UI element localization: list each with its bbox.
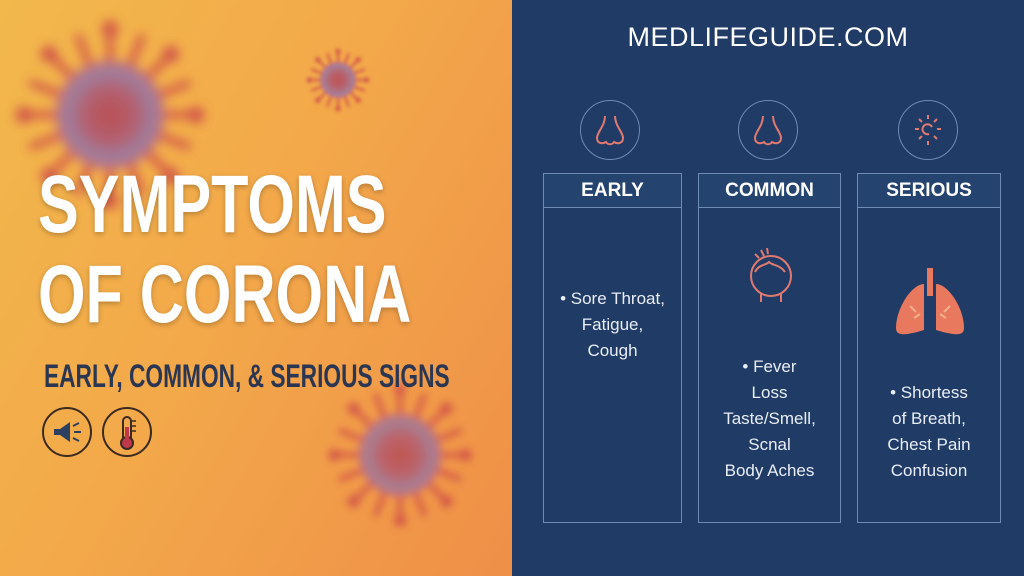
icon: nose early	[580, 100, 640, 160]
text: serious symptoms: • Shortess	[890, 383, 968, 402]
column: serious	[857, 173, 1001, 523]
icon: virus serious	[898, 100, 958, 160]
column: common	[698, 173, 841, 523]
text: early symptoms: Fatigue,	[582, 315, 643, 334]
title	[38, 159, 412, 340]
text: common symptoms: Body Aches	[725, 461, 814, 480]
text: common symptoms	[723, 357, 816, 480]
decorative virus bottom	[328, 383, 472, 527]
heading: site: MEDLIFEGUIDE.COM	[627, 22, 909, 52]
icon: thermometer	[102, 407, 152, 457]
text: serious symptoms: of Breath,	[892, 409, 966, 428]
title: SYMPTOMS	[38, 159, 386, 250]
text: common symptoms: Taste/Smell,	[723, 409, 816, 428]
panel: right navy	[512, 0, 1024, 576]
icon: head	[750, 248, 792, 302]
decorative virus small	[306, 48, 370, 112]
column: serious: SERIOUS	[886, 180, 972, 201]
column: common: COMMON	[725, 180, 814, 201]
text: common symptoms: Scnal	[748, 435, 791, 454]
title: OF CORONA	[38, 249, 411, 340]
text: serious symptoms	[887, 383, 971, 480]
subtitle: EARLY, COMMON, & SERIOUS SIGNS	[44, 358, 450, 394]
icon: nose common	[738, 100, 798, 160]
decorative virus large	[16, 21, 205, 210]
text: common symptoms: • Fever	[742, 357, 797, 376]
text: serious symptoms: Chest Pain	[887, 435, 971, 454]
text: early symptoms: • Sore Throat,	[560, 289, 665, 308]
icon: megaphone	[42, 407, 92, 457]
text: serious symptoms: Confusion	[891, 461, 967, 480]
column: early	[543, 173, 682, 523]
text: common symptoms: Loss	[752, 383, 787, 402]
text: early symptoms	[560, 289, 665, 360]
column: early: EARLY	[581, 180, 644, 201]
text: early symptoms: Cough	[587, 341, 638, 360]
icon: lungs	[896, 268, 964, 334]
panel: left orange	[0, 0, 512, 576]
